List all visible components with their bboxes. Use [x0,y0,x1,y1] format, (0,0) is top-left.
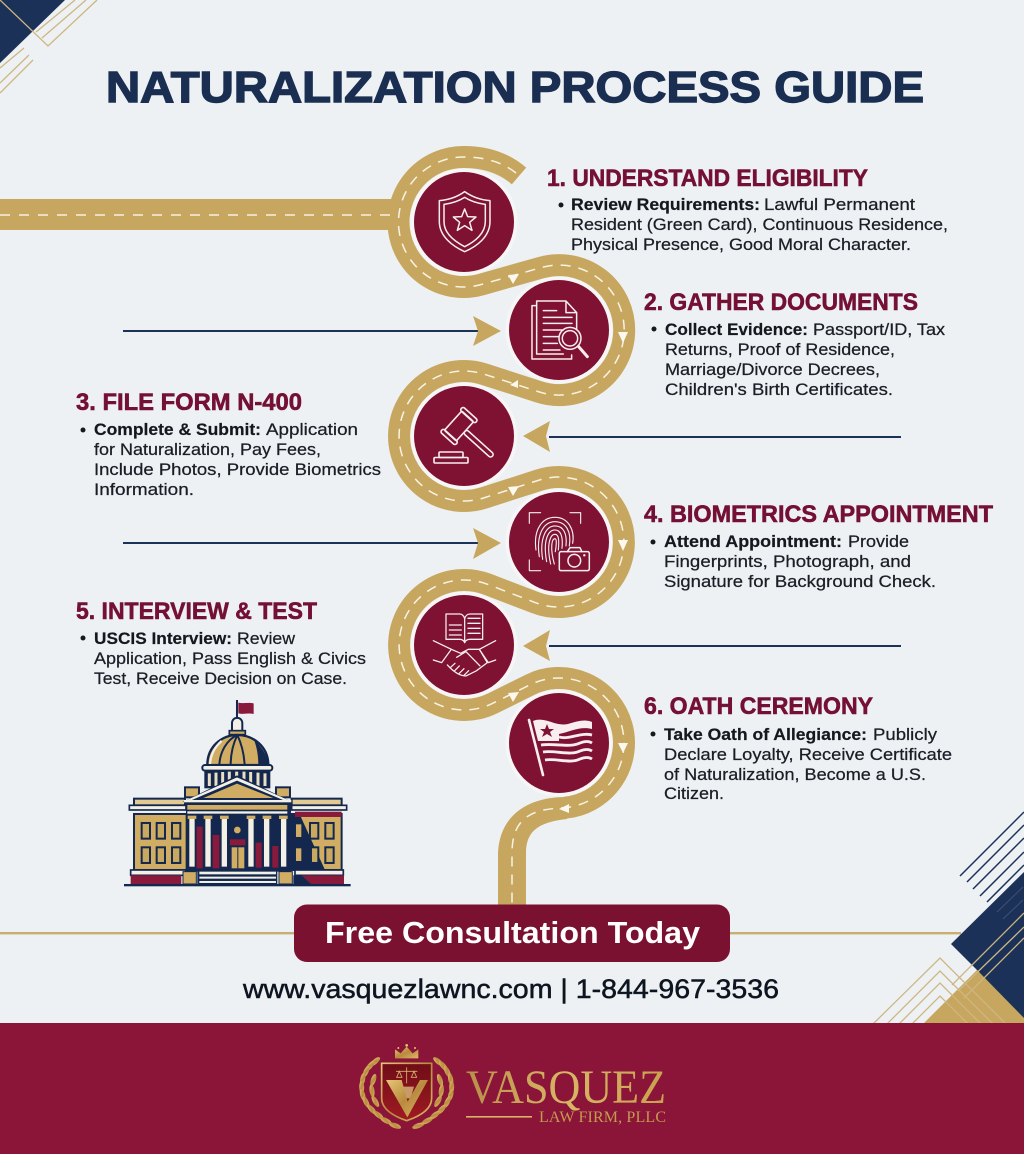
text block: step 3 details: Complete & Submit: [94,420,261,439]
text block: step 3 details: for Naturalization, Pay Fees, [94,440,321,459]
heading: step 3: 3. FILE FORM N-400 [76,389,302,416]
icon: book and handshake [410,592,518,698]
corner decoration: top left [0,0,97,93]
heading: step 2: 2. GATHER DOCUMENTS [644,289,918,316]
text block: step 5 details: USCIS Interview: [94,629,232,648]
text block: step 6 details [650,725,952,803]
text block: step 6 details: Declare Loyalty, Receive Certificate [664,745,952,764]
text block: step 1 details: Physical Presence, Good Moral Character. [571,235,911,254]
call to action button [294,904,730,962]
text block: step 2 details: Collect Evidence: [665,320,808,339]
text block: step 6 details: Citizen. [664,784,724,803]
text block: step 3 details: Application [266,420,358,439]
icon: waving flag [506,690,612,796]
logo wordmark: VASQUEZ [466,1061,666,1114]
text block: step 3 details: Information. [94,480,194,499]
icon: shield with star [410,168,518,276]
heading: step 1: 1. UNDERSTAND ELIGIBILITY [547,165,868,192]
logo emblem [359,1044,455,1130]
text block: step 4 details [650,532,936,591]
heading: step 4: 4. BIOMETRICS APPOINTMENT [644,501,993,528]
logo rule [466,1116,532,1118]
text block: step 6 details: Publicly [873,725,938,744]
text block: step 2 details: Marriage/Divorce Decrees, [665,360,880,379]
icon: gavel [410,382,518,490]
text block: step 3 details: Include Photos, Provide Biometrics [94,460,381,479]
corner decoration: bottom right [873,812,1024,1024]
text block: step 1 details [558,195,948,254]
logo tagline: LAW FIRM, PLLC [539,1109,666,1126]
panel: step 6 oath ceremony [644,693,952,803]
panel: step 4 biometrics appointment [644,501,993,591]
text block: step 2 details: Children's Birth Certificates. [665,380,893,399]
divider line right [729,932,961,934]
text block: step 2 details [652,320,946,399]
heading: step 5: 5. INTERVIEW & TEST [76,598,317,625]
panel: step 3 file form n-400 [76,389,381,499]
icon: fingerprint and camera [506,488,612,596]
logo: vasquez law firm [359,1044,666,1130]
text block: step 5 details: Review [237,629,296,648]
text block: step 5 details: Application, Pass English & Civics [94,649,366,668]
text block: step 2 details: Passport/ID, Tax [813,320,946,339]
panel: step 2 gather documents [644,289,946,399]
text block: step 4 details: Provide [848,532,909,551]
divider line left [0,932,296,934]
connector arrow to step 5 [523,630,901,661]
text block: step 1 details: Review Requirements: [571,195,760,214]
connector arrow to step 3 [523,421,901,452]
title: NATURALIZATION PROCESS GUIDE [106,63,924,112]
panel: step 5 interview and test [76,598,366,688]
connector arrow to step 2 [123,316,501,346]
text block: step 1 details: Lawful Permanent [764,195,915,214]
heading: step 6: 6. OATH CEREMONY [644,693,873,720]
text block: step 5 details: Test, Receive Decision on Case. [94,669,347,688]
text block: step 3 details [80,420,381,499]
icon: documents and magnifier [506,276,612,384]
text block: step 4 details: Signature for Background Check. [664,572,936,591]
call to action button: Free Consultation Today [325,915,701,950]
text block: step 4 details: Attend Appointment: [664,532,842,551]
text block: step 1 details: Resident (Green Card), Continuous Residence, [571,215,948,234]
footer band [0,1023,1024,1154]
text block: step 5 details [80,629,366,688]
text block: step 6 details: of Naturalization, Become a U.S. [664,765,926,784]
panel: step 1 understand eligibility [547,165,948,254]
text block: step 2 details: Returns, Proof of Residence, [665,340,895,359]
icon: capitol building [124,700,351,886]
contact line: www.vasquezlawnc.com | 1-844-967-3536 [242,974,779,1004]
text block: step 6 details: Take Oath of Allegiance: [664,725,867,744]
winding road [0,157,628,905]
connector arrow to step 4 [123,528,501,559]
text block: step 4 details: Fingerprints, Photograph, and [664,552,911,571]
